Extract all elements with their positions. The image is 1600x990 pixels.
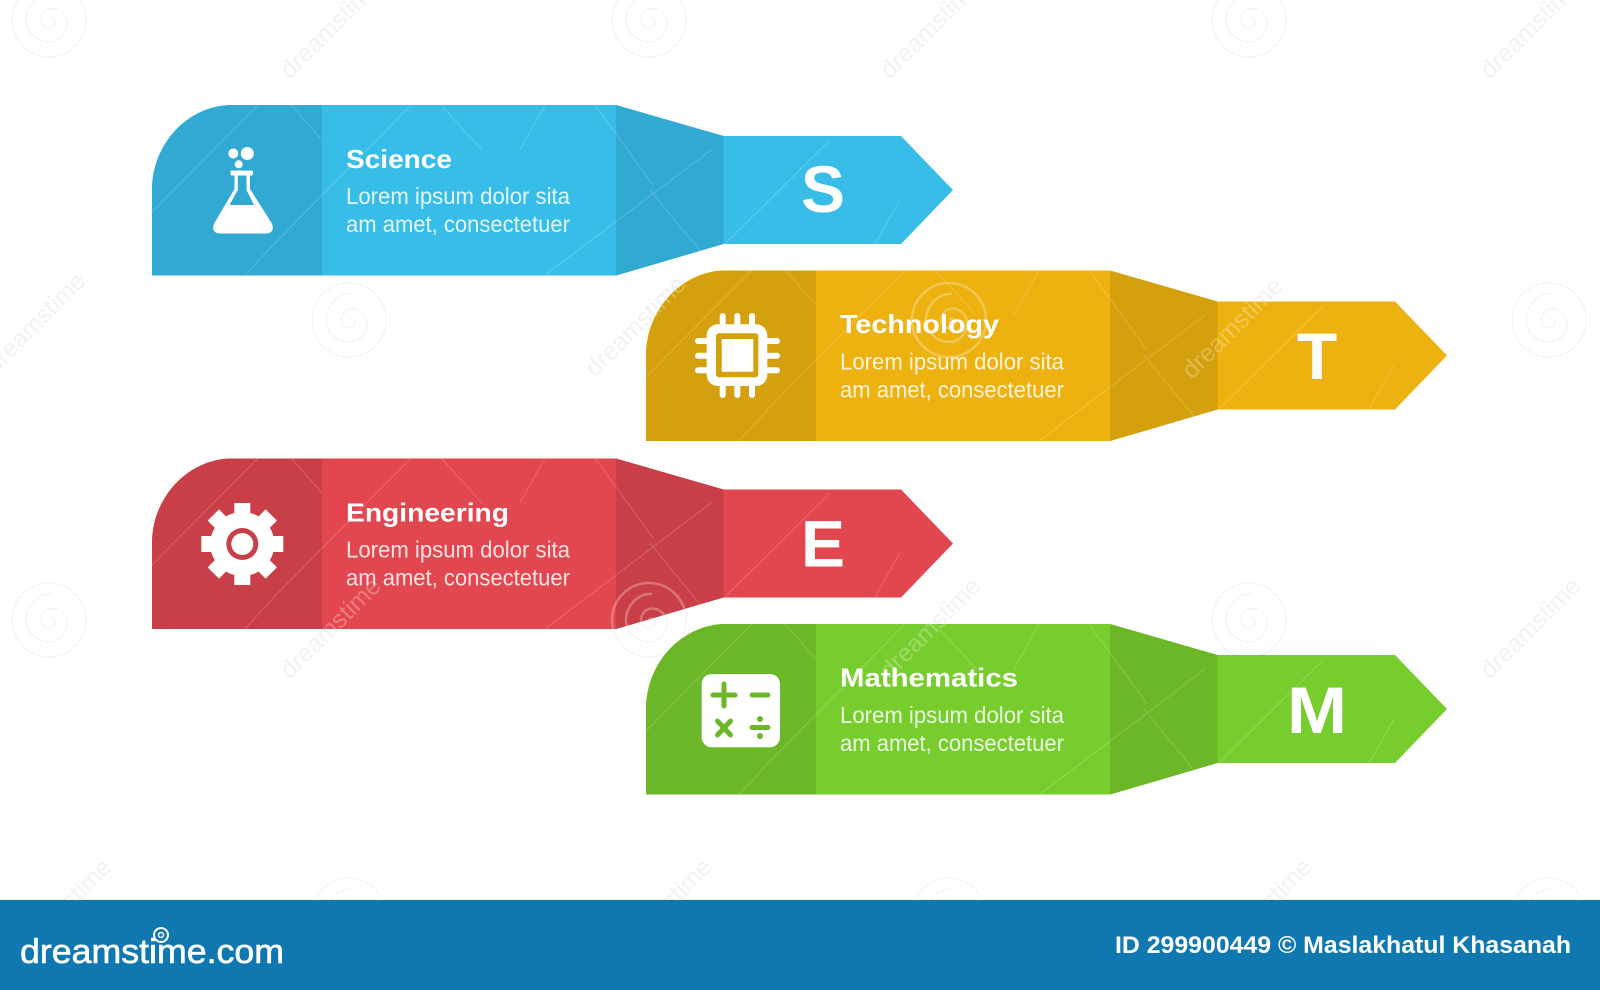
watermark pattern: dreamstime bbox=[1205, 853, 1318, 965]
body text: Science: Lorem ipsum dolor sita bbox=[346, 183, 570, 209]
watermark pattern: dreamstime bbox=[1474, 572, 1587, 684]
neck shade: Science bbox=[616, 105, 724, 276]
letter T: T bbox=[1297, 319, 1337, 393]
band shape: Engineering bbox=[152, 458, 953, 629]
band: Science bbox=[152, 105, 953, 276]
watermark over bands: dreamstime bbox=[274, 572, 387, 684]
watermark pattern: dreamstime bbox=[605, 853, 718, 965]
watermark over bands bbox=[322, 282, 1268, 678]
icon panel: Science bbox=[152, 105, 322, 276]
icon: gear bbox=[201, 503, 283, 585]
watermark over bands: dreamstime bbox=[874, 572, 987, 684]
neck shade: Engineering bbox=[616, 458, 724, 629]
band shape: Technology bbox=[646, 270, 1447, 441]
watermark pattern: dreamstime bbox=[1176, 272, 1289, 384]
heading: Technology: Technology bbox=[840, 309, 1000, 339]
watermark pattern: dreamstime bbox=[579, 270, 692, 382]
body text: Technology: am amet, consectetuer bbox=[840, 376, 1064, 402]
neck shade: Mathematics bbox=[1110, 624, 1218, 794]
band: Technology bbox=[646, 270, 1447, 441]
letter M: M bbox=[1287, 673, 1347, 747]
body text: Engineering: am amet, consectetuer bbox=[346, 564, 570, 590]
body text: Engineering: Lorem ipsum dolor sita bbox=[346, 536, 570, 562]
body text: Technology: Lorem ipsum dolor sita bbox=[840, 348, 1064, 374]
band: Mathematics bbox=[646, 624, 1447, 794]
neck shade: Technology bbox=[1110, 270, 1218, 441]
body text: Mathematics: Lorem ipsum dolor sita bbox=[840, 702, 1064, 728]
icon panel: Mathematics bbox=[646, 624, 816, 794]
footer bar bbox=[0, 900, 1600, 990]
icon: chip bbox=[698, 316, 777, 395]
icon panel: Technology bbox=[646, 270, 816, 441]
watermark lines over bands bbox=[151, 105, 1394, 795]
band: Engineering bbox=[152, 458, 953, 629]
heading: Science: Science bbox=[346, 144, 452, 174]
body text: Mathematics: am amet, consectetuer bbox=[840, 730, 1064, 756]
icon: calculator bbox=[702, 674, 780, 747]
letter E: E bbox=[801, 506, 845, 580]
watermark pattern: dreamstime bbox=[5, 853, 118, 965]
letter S: S bbox=[801, 152, 845, 226]
watermark over bands: dreamstime bbox=[1176, 272, 1289, 384]
watermark pattern: dreamstime bbox=[874, 572, 987, 684]
watermark pattern: dreamstime bbox=[274, 572, 387, 684]
heading: Engineering: Engineering bbox=[346, 498, 509, 528]
heading: Mathematics: Mathematics bbox=[840, 662, 1018, 692]
icon: flask bbox=[213, 147, 273, 234]
image ID and credit: ID 299900449 © Maslakhatul Khasanah bbox=[1115, 932, 1571, 959]
icon panel: Engineering bbox=[152, 458, 322, 629]
band shape: Mathematics bbox=[646, 624, 1447, 794]
band shape: Science bbox=[152, 105, 953, 276]
watermark over bands: dreamstime bbox=[579, 270, 692, 382]
body text: Science: am amet, consectetuer bbox=[346, 211, 570, 237]
logo: dreamstime.com: dreamstime.com bbox=[20, 933, 284, 971]
